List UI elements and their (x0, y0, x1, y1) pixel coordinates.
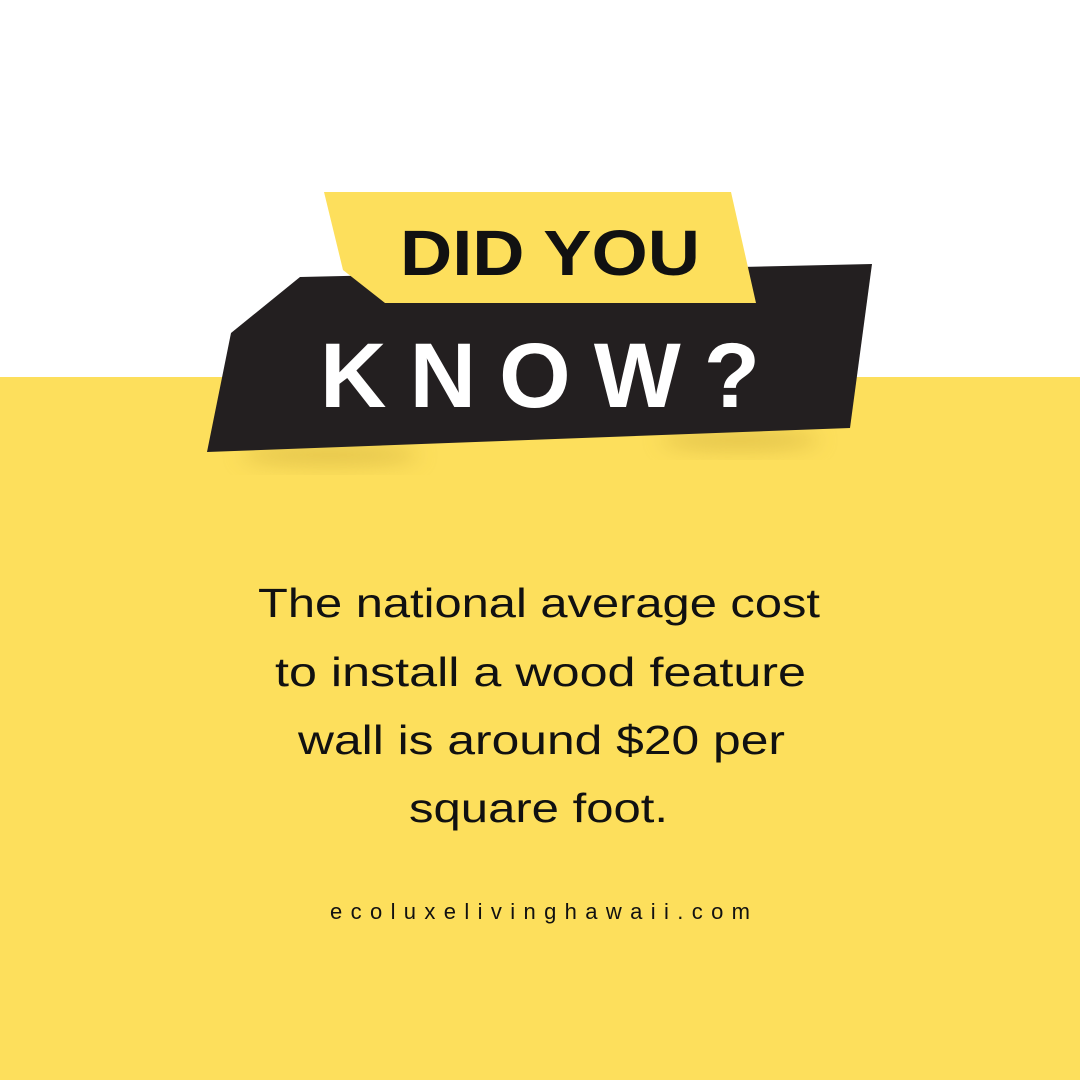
heading: know?: KNOW? (320, 325, 760, 427)
yellow tab (324, 192, 756, 303)
body text (258, 580, 821, 831)
body text: wall is around $20 per (297, 717, 785, 763)
badge: did you know (207, 192, 872, 465)
heading: did you: DID YOU (400, 217, 700, 289)
website url: ecoluxelivinghawaii.com (330, 899, 750, 924)
black banner (207, 264, 872, 452)
body text: The national average cost (258, 580, 821, 626)
body text: to install a wood feature (275, 649, 806, 695)
body text: square foot. (409, 785, 668, 831)
